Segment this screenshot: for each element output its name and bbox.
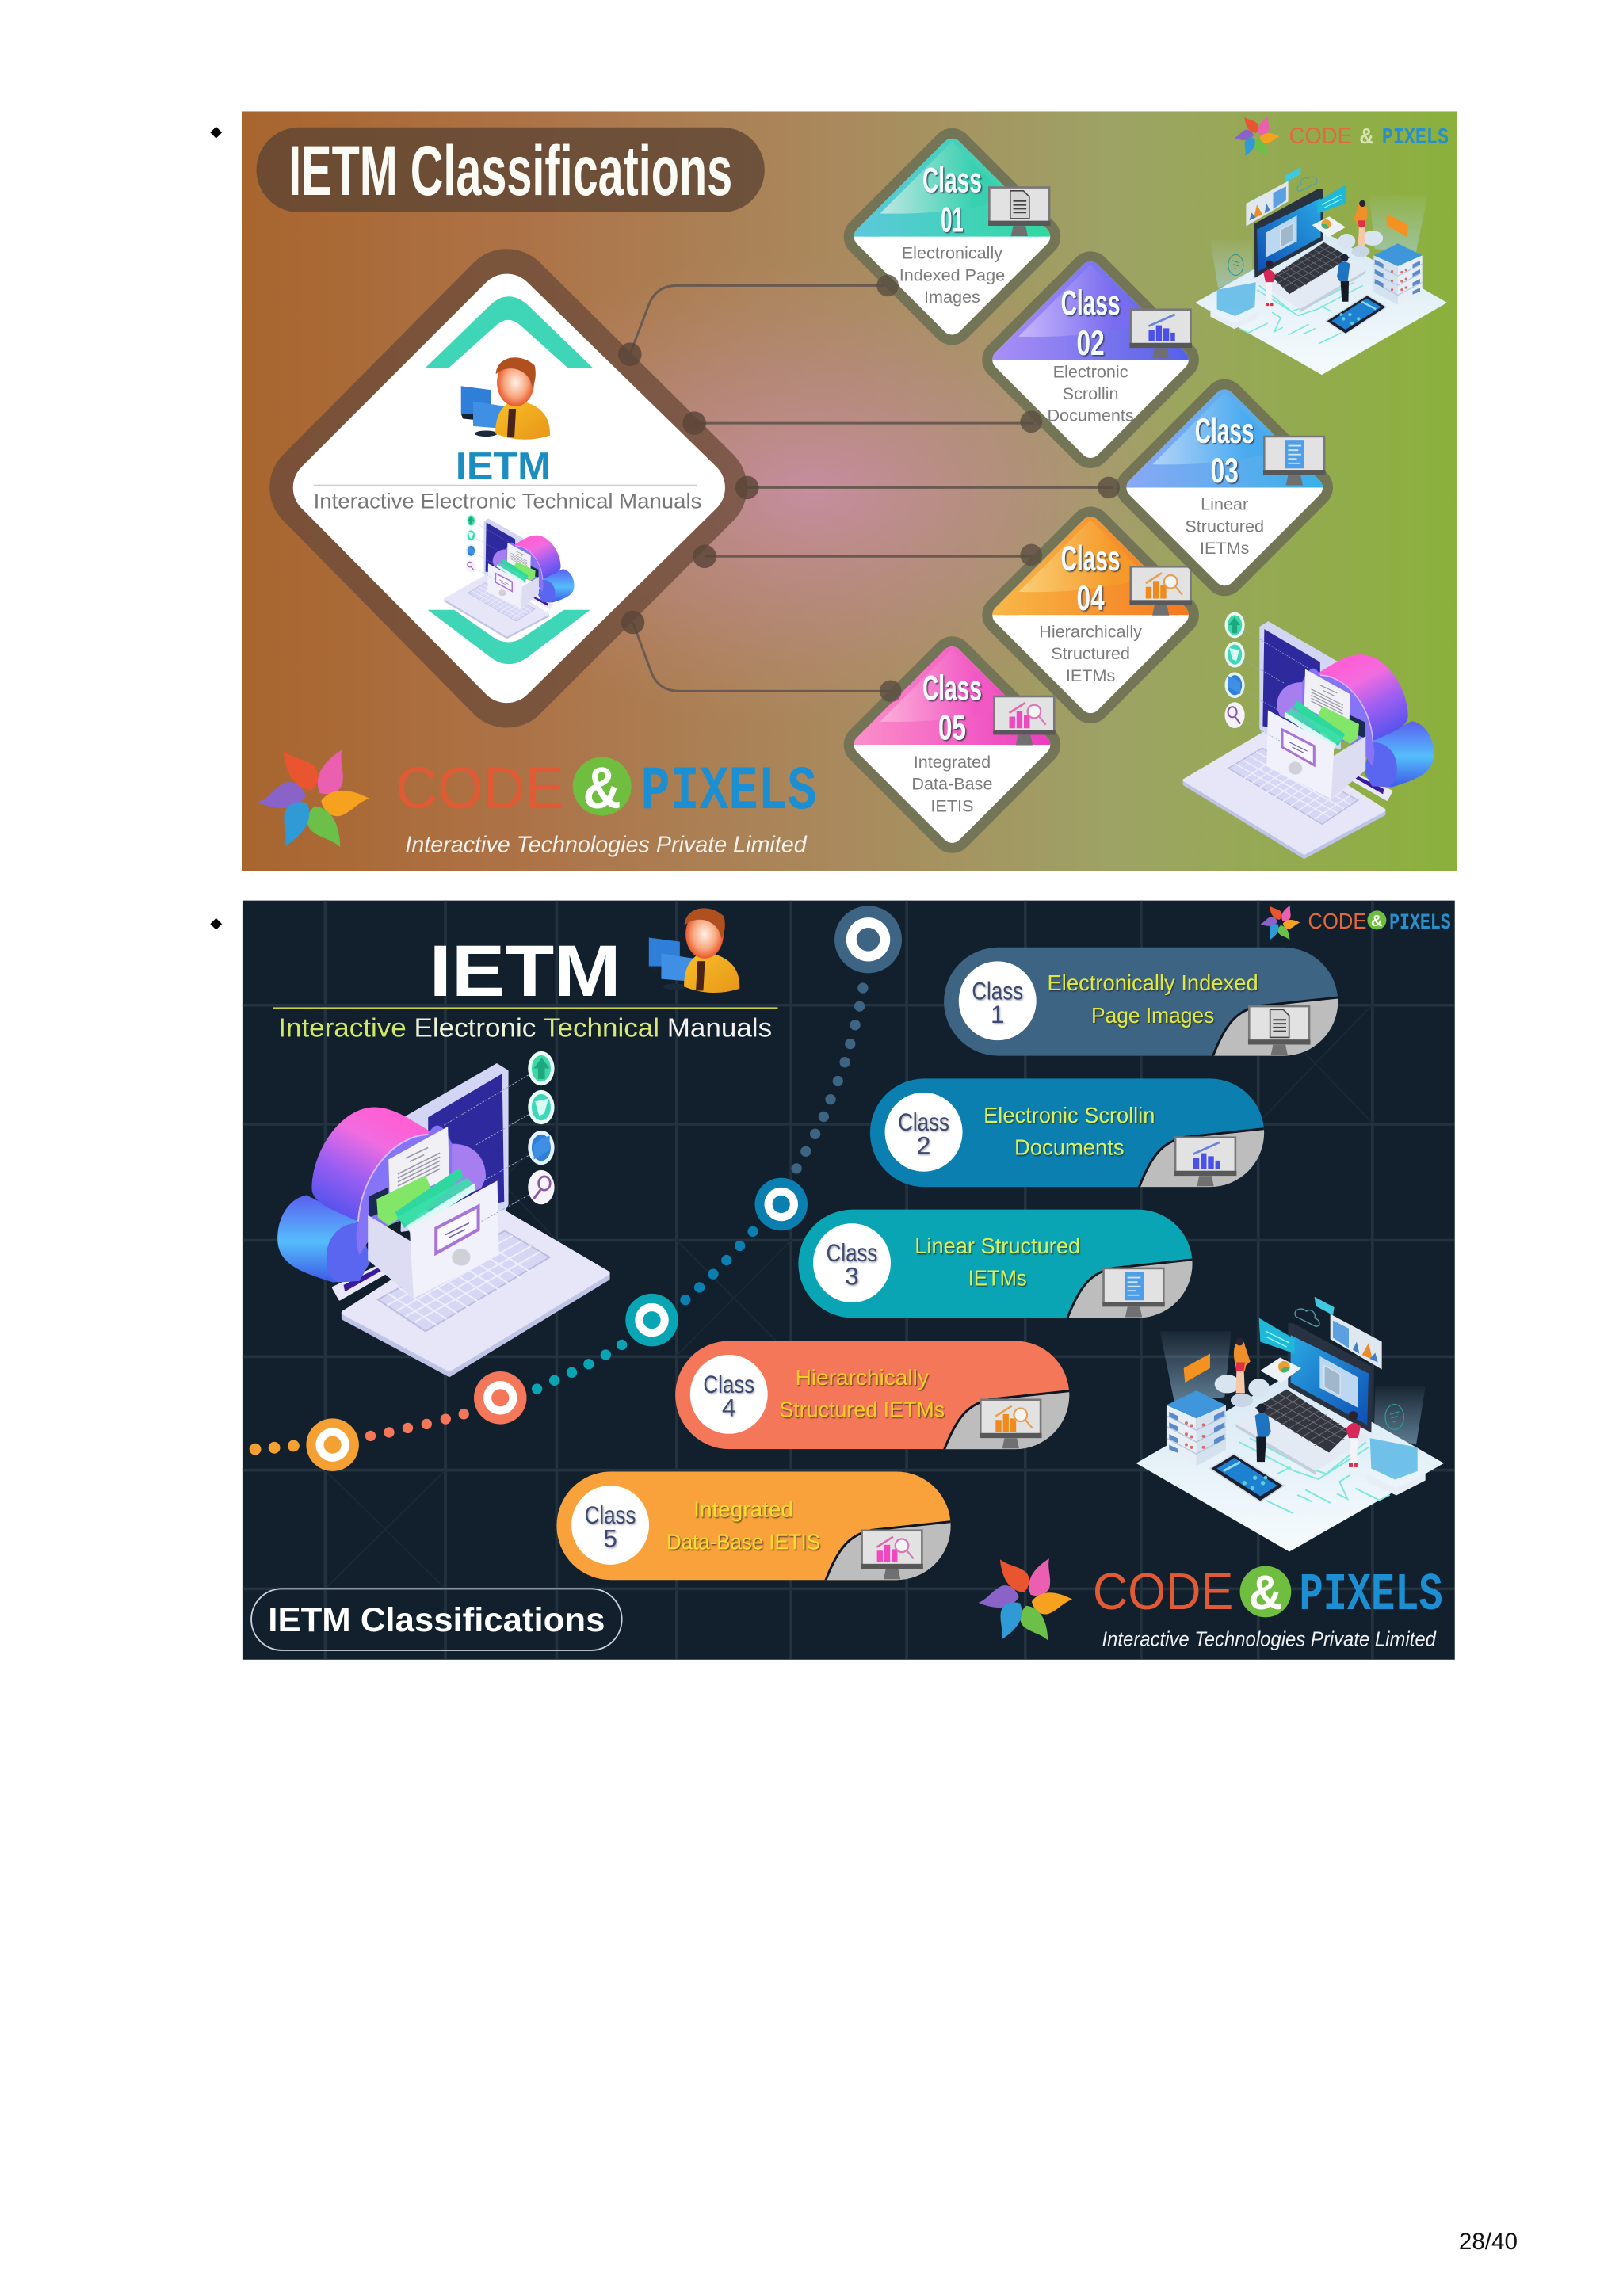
class 03 diamond: IETMs	[1200, 538, 1250, 558]
class 4 pill: Structured IETMs	[779, 1398, 945, 1422]
connector dots	[618, 342, 758, 634]
class 02 diamond: Scrollin	[1063, 383, 1119, 403]
logo bottom right: Code and Pixels: CODE	[1093, 1562, 1233, 1620]
logo bottom: Code and Pixels: PIXELS	[641, 757, 816, 827]
logo top right: Code and Pixels: CODE	[1289, 124, 1352, 149]
illustration: laptop and cloud	[445, 514, 575, 638]
class 04 diamond: Hierarchically	[1039, 621, 1142, 641]
class 02 diamond: Electronic	[1053, 361, 1128, 381]
logo bottom right: Code and Pixels: PIXELS	[1299, 1566, 1443, 1625]
dotted path with rings	[250, 906, 902, 1471]
panel: IETM classifications diamond layout	[242, 105, 1457, 871]
class 03 diamond: Structured	[1185, 516, 1264, 536]
illustration: laptop and cloud drawer	[277, 1051, 608, 1375]
class 01 diamond: Images	[924, 287, 980, 307]
class 03 diamond: 03	[1211, 452, 1239, 490]
class 02 diamond: 02	[1077, 324, 1105, 363]
class 03 diamond: Linear	[1201, 494, 1248, 514]
icon: person at computer	[461, 357, 550, 440]
class 04 diamond: Class	[1061, 540, 1121, 578]
class 2 pill: Documents	[1014, 1135, 1125, 1160]
logo top right: Code and Pixels: PIXELS	[1389, 911, 1451, 936]
class 5 pill: Data-Base IETIS	[666, 1529, 820, 1554]
subtitle: Interactive Electronic Technical Manuals	[278, 1014, 772, 1043]
bottom teal chevron	[428, 610, 590, 664]
label pill: IETM Classifications: IETM Classifications	[268, 1602, 605, 1639]
class 5 pill: Class	[585, 1501, 636, 1529]
illustration: laptop and cloud drawer	[1185, 612, 1434, 857]
logo top right: Code and Pixels	[1260, 902, 1451, 943]
class 1 pill: Class	[972, 977, 1023, 1005]
class 02 diamond: Documents	[1047, 406, 1134, 425]
IETM heading: IETM	[456, 445, 551, 487]
class 04 diamond: 04	[1077, 579, 1105, 618]
class 3 pill: IETMs	[968, 1266, 1027, 1291]
connector lines from main diamond to classes	[630, 285, 1113, 691]
class 2 pill: Class	[898, 1108, 949, 1136]
class 01 diamond: Class	[922, 161, 982, 200]
class 4 pill	[675, 1341, 1072, 1452]
logo top right: Code and Pixels: &	[1359, 124, 1374, 148]
logo bottom: Code and Pixels: Interactive Technologies Private Limited	[405, 833, 808, 858]
title pill: IETM Classifications: IETM Classifications	[288, 132, 732, 210]
class 01 diamond: Indexed Page	[899, 265, 1005, 284]
page number: 28/40	[1459, 2229, 1518, 2255]
logo top right: Code and Pixels: &	[1371, 913, 1383, 930]
logo bottom right: Code and Pixels: &	[1249, 1566, 1282, 1619]
icon: person at computer	[649, 908, 739, 993]
class 2 pill	[870, 1078, 1267, 1190]
class 04 diamond: Structured	[1051, 643, 1130, 663]
class 1 pill	[944, 948, 1341, 1058]
class 01 diamond: Electronically	[902, 243, 1002, 263]
logo bottom: Code and Pixels	[258, 742, 816, 858]
logo top right: Code and Pixels	[1234, 113, 1449, 159]
class 05 diamond	[842, 613, 1056, 833]
class 1 pill: Page Images	[1091, 1003, 1214, 1028]
label pill: IETM Classifications	[251, 1589, 622, 1650]
top teal chevron	[425, 296, 594, 368]
class 2 pill: Electronic Scrollin	[983, 1103, 1155, 1127]
class 03 diamond	[1115, 356, 1326, 575]
class 01 diamond	[842, 105, 1051, 325]
class 05 diamond: Class	[922, 669, 982, 708]
class 4 pill: 4	[722, 1394, 735, 1421]
class 3 pill: Class	[827, 1239, 877, 1267]
class 05 diamond: IETIS	[930, 795, 973, 815]
class 5 pill: Integrated	[693, 1497, 793, 1522]
class 1 pill: Electronically Indexed	[1048, 971, 1258, 995]
class 3 pill: Linear Structured	[915, 1234, 1080, 1258]
class 5 pill	[556, 1471, 953, 1583]
class 4 pill: Hierarchically	[796, 1365, 929, 1390]
class 05 diamond: Data-Base	[911, 774, 992, 794]
class 02 diamond: Class	[1061, 284, 1121, 323]
main diamond: IETM	[314, 296, 701, 681]
class 05 diamond: 05	[938, 709, 966, 748]
class 01 diamond: 01	[941, 200, 964, 239]
class 3 pill	[798, 1210, 1195, 1321]
logo top right: Code and Pixels: CODE	[1308, 909, 1366, 933]
class connector dots	[876, 275, 1120, 702]
class 05 diamond: Integrated	[914, 752, 991, 772]
illustration: isometric workstation	[1195, 167, 1447, 375]
class 04 diamond: IETMs	[1066, 666, 1115, 685]
subtitle: Interactive Electronic Technical Manuals	[314, 489, 701, 513]
class 3 pill: 3	[845, 1263, 859, 1291]
class 5 pill: 5	[603, 1524, 617, 1552]
logo top right: Code and Pixels: PIXELS	[1382, 124, 1449, 151]
class 04 diamond	[980, 483, 1192, 703]
class 4 pill: Class	[703, 1371, 754, 1398]
illustration: isometric workstation	[1136, 1297, 1444, 1552]
logo bottom right: Code and Pixels	[979, 1551, 1443, 1650]
class 03 diamond: Class	[1195, 412, 1254, 451]
class 2 pill: 2	[917, 1131, 930, 1159]
panel: IETM classifications dark pill layout	[243, 901, 1455, 1660]
heading: IETM: IETM	[430, 931, 621, 1012]
logo bottom right: Code and Pixels: Interactive Technologies Private Limited	[1102, 1628, 1437, 1650]
bullet markers	[210, 127, 222, 930]
class 02 diamond	[980, 228, 1192, 448]
logo bottom: Code and Pixels: CODE	[395, 755, 564, 821]
class 1 pill: 1	[991, 1001, 1004, 1028]
title pill: IETM Classifications	[257, 128, 765, 212]
logo bottom: Code and Pixels: &	[583, 755, 621, 821]
